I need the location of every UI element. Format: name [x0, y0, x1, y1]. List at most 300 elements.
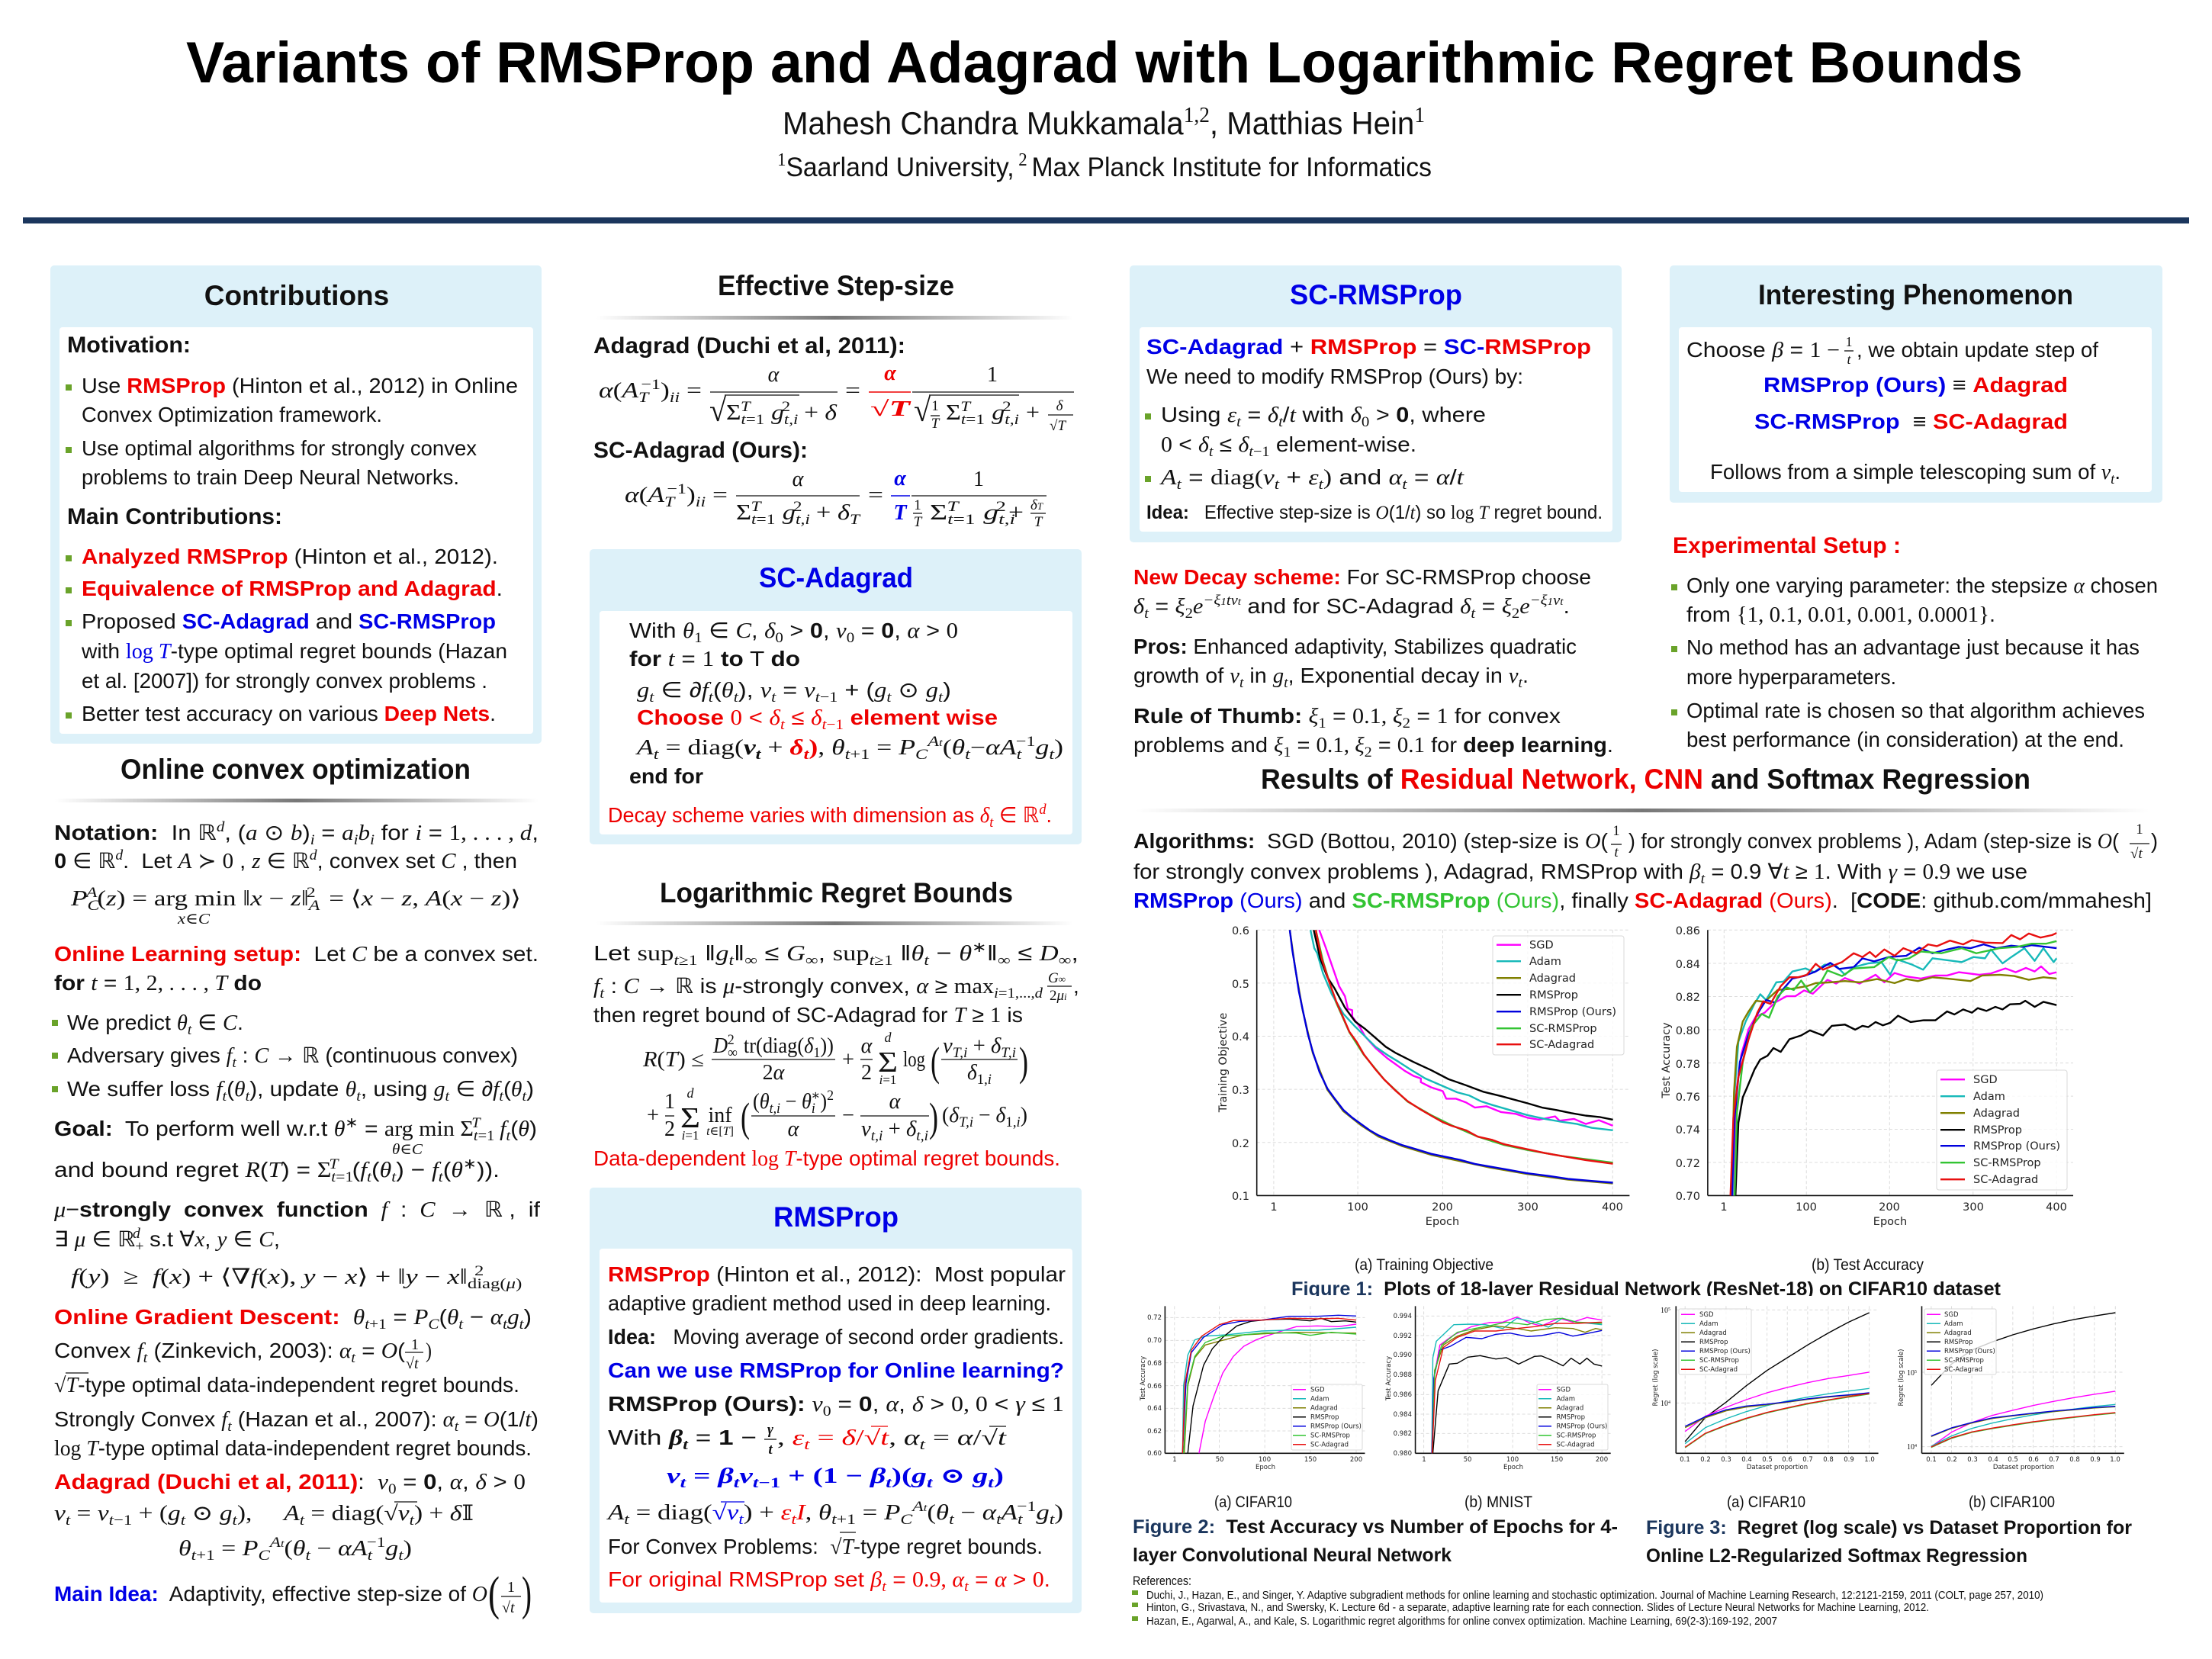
figure 3 caption: Online L2-Regularized Softmax Regression: [1646, 1545, 2027, 1567]
panel: sc-adagrad: [590, 549, 1082, 844]
heading: logarithmic regret bounds: Logarithmic Regret Bounds: [660, 877, 1013, 908]
x axis labels: 50: [1216, 1456, 1223, 1464]
formula: rmsprop update: γ: [767, 1422, 773, 1438]
y axis labels: [1898, 1349, 1917, 1452]
formula: rmsprop update: For Convex Problems: √T-type regret bounds.: [608, 1535, 1043, 1559]
formula: sc-adagrad step-size: T: [914, 514, 923, 530]
formula: regret bound: (: [931, 1039, 940, 1085]
text block: assumptions: ft : C → ℝ is μ-strongly convex, α ≥ maxi=1,...,d: [593, 974, 1043, 1002]
y axis labels: Training Objective: [1217, 1013, 1230, 1113]
text block: algorithms: t: [1614, 844, 1619, 860]
text block: main contributions: Better test accuracy on various Deep Nets.: [82, 702, 496, 725]
chart: mnist cnn test accuracy: [1385, 1306, 1611, 1471]
x axis labels: 300: [1517, 1201, 1538, 1214]
formula: regret bound: [642, 1030, 1028, 1144]
x axis labels: 100: [1347, 1201, 1368, 1214]
text block: online learning setup: Adversary gives ft : C → ℝ (continuous convex): [67, 1043, 518, 1071]
formula: adagrad step-size: α: [884, 362, 896, 385]
x axis labels: 200: [1350, 1456, 1362, 1464]
text block: experimental setup: Optimal rate is chosen so that algorithm achieves: [1686, 699, 2145, 722]
legend: SC-RMSProp: [1699, 1357, 1739, 1365]
y axis labels: 0.64: [1147, 1405, 1162, 1413]
formula: regret bound: d: [885, 1030, 892, 1045]
text block: online learning setup: We predict θt ∈ C.: [67, 1011, 243, 1038]
text block: adagrad: vt = vt−1 + ( gt ⊙ gt), At = diag(√ vt) + δ𝕀: [54, 1502, 474, 1529]
algorithm: sc-adagrad: Decay scheme varies with dimension as δt ∈ ℝd.: [608, 802, 1052, 831]
text block: new decay scheme: Pros: Enhanced adaptivity, Stabilizes quadratic: [1133, 635, 1577, 658]
formula: regret bound: α: [861, 1034, 873, 1058]
formula: adagrad step-size: 1: [931, 398, 939, 414]
references: Hinton, G., Srivastava, N., and Swersky, K. Lecture 6d - a separate, adaptive learning rate for each connection. Slides of Lecture Neural Networks for Machine Learning, 2012.: [1146, 1602, 1929, 1614]
text block: strongly convex function: [53, 1198, 540, 1292]
formula: adagrad step-size: √T: [1050, 418, 1066, 434]
x axis labels: 1.0: [1864, 1456, 1875, 1464]
text block: equivalences: t: [1847, 352, 1851, 367]
formula: rmsprop update: v t = β tv t−1 + (1 − β t)( g t ⊙ g t): [667, 1464, 1004, 1491]
legend: RMSProp: [1699, 1339, 1728, 1346]
references: Duchi, J., Hazan, E., and Singer, Y. Adaptive subgradient methods for online learning and stochastic optimization. Journal of Machine Learning Research, 12:2121-2159, 2011 (COLT, page 257, 2010): [1146, 1590, 2043, 1602]
text block: rmsprop description: [608, 1262, 1066, 1419]
text block: algorithms: [1133, 821, 2158, 912]
formula: adagrad step-size: Σt=1T gt,i2 + δ: [726, 399, 838, 428]
formula: regret bound: log: [903, 1048, 925, 1072]
x axis labels: Epoch: [1503, 1464, 1523, 1471]
y axis labels: Test Accuracy: [1661, 1022, 1673, 1099]
formula: regret bound: (δT,i − δ1,i): [942, 1104, 1027, 1130]
references: References:: [1133, 1574, 1191, 1588]
figure 1 caption: Figure 1: Plots of 18-layer Residual Network (ResNet-18) on CIFAR10 dataset: [1291, 1278, 2001, 1300]
x axis labels: 1.0: [2110, 1456, 2120, 1464]
text block: online gradient descent: Convex ft (Zinkevich, 2003): αt = O(: [54, 1339, 406, 1366]
formula: adagrad step-size: Adagrad (Duchi et al, 2011):: [593, 333, 905, 358]
authors: Mahesh Chandra Mukkamala1,2, Matthias Hein1: [783, 104, 1425, 141]
y axis labels: 0.76: [1676, 1092, 1700, 1104]
legend: SC-RMSProp: [1944, 1357, 1984, 1365]
text block: rmsprop description: Can we use RMSProp for Online learning?: [608, 1358, 1064, 1382]
text block: motivation: Use optimal algorithms for strongly convex: [82, 436, 477, 460]
formula: adagrad step-size: Σt=1T gt,i2: [946, 399, 1019, 428]
formula: sc-adagrad step-size: α(AT−1)ii =: [625, 481, 728, 510]
legend: Adagrad: [1944, 1329, 1972, 1337]
chart: cifar100 regret: [1898, 1306, 2124, 1471]
text block: online learning setup: for t = 1, 2, . . . , T do: [54, 971, 262, 995]
y axis labels: 0.72: [1147, 1314, 1162, 1322]
text block: online gradient descent: Strongly Convex ft (Hazan et al., 2007): αt = O(1/t): [54, 1407, 539, 1435]
formula: sc-adagrad step-size: SC-Adagrad (Ours):: [593, 438, 808, 463]
y axis labels: 0.66: [1147, 1383, 1162, 1391]
y axis labels: Test Accuracy: [1140, 1356, 1147, 1401]
panel: rmsprop: [590, 1188, 1082, 1613]
text block: online learning setup: We suffer loss ft(θt), update θt, using gt ∈ ∂ft(θt): [67, 1077, 534, 1104]
formula: adagrad step-size: δ: [1056, 398, 1064, 414]
text block: motivation: Use RMSProp (Hinton et al., 2012) in Online: [82, 374, 518, 397]
algorithm: sc-adagrad: At = diag( vt + δt), θt+1 = PCAt(θt−αA t−1gt): [635, 734, 1063, 763]
x axis labels: 200: [1879, 1201, 1900, 1214]
chart: training objective: [1217, 925, 1629, 1228]
y axis labels: 0.4: [1232, 1031, 1249, 1043]
x axis labels: 150: [1551, 1456, 1563, 1464]
text block: strongly convex function: f(y) ≥ f(x) + ⟨∇ f(x), y − x⟩ + ‖ y − x‖diag( μ)2: [71, 1263, 522, 1292]
formula: adagrad step-size: +: [1026, 401, 1040, 425]
y axis labels: 0.5: [1232, 979, 1249, 991]
callout: main idea: ): [522, 1568, 532, 1620]
text block: equivalences: Choose β = 1 −: [1686, 338, 1840, 362]
y axis labels: 5: [1668, 1307, 1670, 1312]
section: effective step-size: [593, 270, 1074, 530]
heading: interesting phenomenon: Interesting Phenomenon: [1758, 279, 2073, 310]
formula: regret bound: +: [842, 1048, 854, 1072]
y axis labels: 0.86: [1676, 925, 1700, 937]
algorithm: sc-adagrad: gt ∈ ∂ ft(θt), vt = vt−1 + (gt ⊙ gt): [637, 678, 951, 706]
x axis labels: 0.3: [1721, 1456, 1731, 1464]
x axis labels: Dataset proportion: [1993, 1464, 2054, 1471]
formula: regret bound: ): [1019, 1039, 1028, 1085]
formula: adagrad step-size: √ T: [870, 397, 912, 421]
formula: sc-adagrad step-size: =: [868, 484, 883, 507]
legend: [1937, 1070, 2067, 1190]
text block: assumptions: ,: [1073, 974, 1079, 998]
x axis labels: [1926, 1456, 2120, 1471]
text block: goal: [54, 1115, 537, 1185]
figure 2 caption: Figure 2: Test Accuracy vs Number of Epochs for 4-: [1133, 1516, 1618, 1538]
text block: main contributions: [66, 504, 507, 725]
text block: new decay scheme: problems and ξ1 = 0.1, ξ2 = 0.1 for deep learning.: [1133, 733, 1613, 760]
text block: notation: [54, 819, 539, 928]
note: data-dependent bounds: Data-dependent log T-type optimal regret bounds.: [593, 1146, 1060, 1171]
heading: online convex optimization: Online convex optimization: [121, 754, 471, 785]
formula: regret bound: i=1: [682, 1128, 699, 1143]
section: results: [1133, 764, 2158, 912]
y axis labels: [1217, 925, 1249, 1203]
x axis labels: 0.8: [1823, 1456, 1834, 1464]
y axis labels: 5: [1915, 1370, 1917, 1374]
text block: online gradient descent: √t: [406, 1355, 419, 1372]
algorithm: sc-adagrad: With θ1 ∈ C, δ0 > 0, v0 = 0, α > 0: [629, 619, 958, 646]
text block: sc-rmsprop description: At = diag( vt + εt) and αt = α/t: [1159, 465, 1464, 493]
x axis labels: 0.7: [2049, 1456, 2059, 1464]
text block: algorithms: ) for strongly convex problems ), Adam (step-size is O(: [1628, 829, 2120, 854]
legend: SC-RMSProp: [1973, 1157, 2041, 1169]
text block: main contributions: Main Contributions:: [67, 504, 282, 529]
legend: SC-RMSProp: [1310, 1432, 1350, 1440]
x axis labels: 1: [1270, 1201, 1278, 1214]
y axis labels: 0.990: [1394, 1352, 1412, 1359]
y axis labels: 10: [1661, 1400, 1668, 1408]
figure 2 and 3 subcaptions: (a) CIFAR10: [1214, 1493, 1292, 1511]
x axis labels: 0.9: [2090, 1456, 2101, 1464]
formula: rmsprop update: For original RMSProp set βt = 0.9, αt = α > 0.: [608, 1567, 1050, 1595]
legend: SGD: [1944, 1311, 1959, 1319]
formula: rmsprop update: With βt = 1 −: [608, 1426, 757, 1453]
legend: RMSProp (Ours): [1699, 1348, 1751, 1355]
section: logarithmic regret bounds: [593, 877, 1079, 1171]
text block: sc-rmsprop description: Idea: Effective step-size is O(1/t) so log T regret bound.: [1146, 502, 1603, 523]
x axis labels: 0.6: [2028, 1456, 2039, 1464]
x axis labels: 100: [1259, 1456, 1271, 1464]
formula: adagrad step-size: [593, 333, 1074, 434]
formula: regret bound: α: [788, 1117, 800, 1141]
text block: main contributions: Equivalence of RMSProp and Adagrad .: [82, 577, 503, 600]
y axis labels: 0.78: [1676, 1059, 1700, 1071]
text block: equivalences: , we obtain update step of: [1857, 338, 2098, 362]
legend: SGD: [1556, 1387, 1571, 1394]
panel: interesting phenomenon: [1670, 265, 2162, 503]
y axis labels: [1661, 925, 1700, 1203]
heading: rmsprop: RMSProp: [773, 1201, 899, 1233]
text block: assumptions: 2μi: [1050, 988, 1067, 1004]
formula: regret bound: D∞2 tr(diag(δ1)): [712, 1032, 834, 1061]
formula: regret bound: −: [842, 1104, 854, 1127]
text block: assumptions: G∞: [1048, 970, 1066, 986]
legend: Adagrad: [1973, 1108, 2020, 1120]
text block: notation: Notation: In ℝd, (a ⊙ b)i = aibi for i = 1, . . . , d,: [54, 819, 539, 848]
legend: RMSProp (Ours): [1944, 1348, 1995, 1355]
text block: online gradient descent: Online Gradient Descent: θt+1 = PC(θt − αtgt): [54, 1305, 532, 1333]
legend: SC-RMSProp: [1529, 1023, 1597, 1035]
text block: online gradient descent: [54, 1305, 539, 1461]
legend: Adam: [1310, 1396, 1329, 1403]
formula: regret bound: (θt,i − θi∗)2: [753, 1088, 834, 1117]
text block: assumptions: [593, 940, 1079, 1027]
text block: sc-rmsprop description: [1145, 335, 1603, 523]
formula: regret bound: α: [889, 1090, 902, 1114]
formula: sc-adagrad step-size: Σt=1T gt,i2 + δT: [736, 499, 861, 528]
heading: sc-rmsprop: SC-RMSProp: [1290, 279, 1462, 310]
x axis labels: 0.5: [2008, 1456, 2018, 1464]
text block: goal: θ∈C: [392, 1141, 423, 1158]
figure 2 and 3 subcaptions: (b) MNIST: [1464, 1493, 1532, 1511]
formula: adagrad step-size: T: [931, 416, 940, 432]
text block: main contributions: Analyzed RMSProp (Hinton et al., 2012).: [82, 545, 498, 568]
y axis labels: 0.994: [1394, 1313, 1412, 1320]
x axis labels: [1680, 1456, 1875, 1471]
y axis labels: 0.984: [1394, 1411, 1412, 1419]
x axis labels: 400: [1602, 1201, 1623, 1214]
text block: algorithms: √t: [2130, 846, 2143, 862]
text block: motivation: [66, 333, 518, 489]
formula: regret bound: 2: [861, 1061, 872, 1085]
formula: regret bound: +: [647, 1104, 659, 1127]
formula: regret bound: t∈[T]: [706, 1125, 734, 1138]
formula: regret bound: Σ: [680, 1102, 700, 1134]
formula: adagrad step-size: √: [914, 394, 931, 429]
legend: RMSProp (Ours): [1310, 1423, 1362, 1431]
text block: assumptions: then regret bound of SC-Adagrad for T ≥ 1 is: [593, 1003, 1023, 1027]
text block: strongly convex function: μ−strongly convex function f : C → ℝ , if: [53, 1198, 540, 1222]
formula: regret bound: (: [741, 1095, 750, 1140]
formula: sc-adagrad step-size: 1: [973, 468, 984, 491]
x axis labels: Epoch: [1256, 1464, 1275, 1471]
title: Variants of RMSProp and Adagrad with Logarithmic Regret Bounds: [186, 31, 2023, 95]
algorithm: sc-adagrad: end for: [629, 764, 703, 788]
legend: RMSProp (Ours): [1529, 1006, 1616, 1018]
legend: Adam: [1556, 1396, 1575, 1403]
legend: SC-Adagrad: [1699, 1366, 1738, 1374]
legend: Adam: [1973, 1091, 2005, 1103]
chart: cifar10 regret: [1652, 1306, 1879, 1471]
x axis labels: 0.2: [1947, 1456, 1957, 1464]
x axis labels: 0.7: [1802, 1456, 1813, 1464]
text block: sc-rmsprop description: SC-Adagrad + RMSProp = SC-RMSProp: [1146, 335, 1591, 358]
callout: main idea: (: [488, 1568, 500, 1620]
text block: sc-rmsprop description: 0 < δt ≤ δt−1 element-wise.: [1161, 432, 1416, 460]
legend: RMSProp (Ours): [1556, 1423, 1607, 1431]
formula: sc-adagrad step-size: Σ t=1T g t,i2: [930, 499, 1015, 528]
text block: adagrad: Adagrad (Duchi et al, 2011) : v0 = 0, α, δ > 0: [54, 1470, 526, 1497]
x axis labels: 1: [1720, 1201, 1728, 1214]
text block: rmsprop description: Idea: Moving average of second order gradients.: [608, 1325, 1064, 1349]
formula: regret bound: 2: [664, 1117, 675, 1141]
text block: motivation: Convex Optimization framework.: [82, 403, 382, 426]
text block: goal: Goal: To perform well w.r.t θ∗ = arg min Σt=1T ft(θ): [54, 1115, 537, 1144]
legend: RMSProp: [1310, 1414, 1339, 1422]
formula: adagrad step-size: α: [768, 363, 780, 387]
x axis labels: 50: [1464, 1456, 1471, 1464]
x axis labels: 0.5: [1762, 1456, 1773, 1464]
formula: regret bound: vt,i + δt,i: [861, 1117, 928, 1144]
text block: online learning setup: Online Learning setup: Let C be a convex set.: [54, 942, 539, 966]
formula: sc-adagrad step-size: 1: [914, 497, 921, 513]
text block: notation: x∈C: [177, 911, 211, 928]
formula: rmsprop update: , εt = δ/√ t, α t = α/√ t: [777, 1426, 1008, 1453]
x axis labels: Epoch: [1426, 1216, 1459, 1228]
text block: new decay scheme: Rule of Thumb: ξ1 = 0.1, ξ2 = 1 for convex: [1133, 704, 1561, 731]
figure 1 subcaptions: [1355, 1256, 1924, 1274]
algorithm: sc-adagrad: for t = 1 to T do: [629, 647, 800, 671]
formula: adagrad step-size: α(AT−1)ii =: [599, 377, 702, 406]
formula: rmsprop update: At = diag( √vt) + εtI, θt+1 = PCAt(θt − αtAt−1gt): [606, 1499, 1063, 1528]
formula: adagrad step-size: 1: [987, 363, 998, 387]
y axis labels: 10: [1907, 1443, 1915, 1452]
y axis labels: 0.70: [1676, 1191, 1700, 1203]
text block: algorithms: 1: [2136, 821, 2143, 838]
formula: sc-adagrad step-size: [593, 438, 1047, 530]
formula: regret bound: inf: [708, 1104, 732, 1127]
text block: equivalences: 1: [1846, 334, 1852, 349]
y axis labels: 0.70: [1147, 1337, 1162, 1345]
text block: sc-rmsprop description: We need to modify RMSProp (Ours) by:: [1146, 365, 1523, 388]
callout: main idea: 1: [507, 1579, 515, 1596]
legend: RMSProp: [1529, 989, 1578, 1002]
legend: Adam: [1944, 1320, 1963, 1328]
legend: SGD: [1310, 1387, 1325, 1394]
text block: online learning setup: [52, 942, 539, 1104]
callout: main idea: [54, 1568, 532, 1620]
formula: sc-adagrad step-size: α: [894, 467, 906, 490]
text block: rmsprop description: RMSProp (Hinton et al., 2012): Most popular: [608, 1262, 1066, 1286]
text block: notation: 0 ∈ ℝd. Let A ≻ 0 , z ∈ ℝd, convex set C , then: [54, 847, 517, 873]
text block: equivalences: Follows from a simple telescoping sum of vt.: [1710, 460, 2120, 487]
text block: algorithms: Algorithms: SGD (Bottou, 2010) (step-size is O(: [1133, 829, 1609, 854]
text block: online gradient descent: 1: [411, 1336, 419, 1353]
y axis labels: 0.2: [1232, 1138, 1249, 1150]
x axis labels: Dataset proportion: [1747, 1464, 1808, 1471]
y axis labels: Test Accuracy: [1385, 1356, 1393, 1401]
text block: experimental setup: more hyperparameters.: [1686, 665, 1896, 689]
formula: regret bound: Σ: [878, 1047, 898, 1079]
callout: main idea: √t: [502, 1600, 515, 1616]
y axis labels: 0.80: [1676, 1025, 1700, 1037]
callout: main idea: Main Idea: Adaptivity, effective step-size of O: [54, 1582, 487, 1606]
formula: rmsprop update: [606, 1422, 1063, 1595]
text block: equivalences: [1686, 334, 2120, 487]
y axis labels: 0.62: [1147, 1428, 1162, 1436]
text block: equivalences: RMSProp (Ours) ≡ Adagrad: [1763, 373, 2068, 397]
figure 2 and 3 subcaptions: (b) CIFAR100: [1969, 1493, 2055, 1511]
y axis labels: 0.60: [1147, 1450, 1162, 1458]
heading: results: Results of Residual Network, CNN and Softmax Regression: [1261, 764, 2030, 795]
x axis labels: 0.4: [1988, 1456, 1998, 1464]
legend: [1537, 1384, 1608, 1450]
y axis labels: 0.68: [1147, 1360, 1162, 1368]
x axis labels: 100: [1796, 1201, 1817, 1214]
y axis labels: 0.3: [1232, 1085, 1249, 1097]
text block: experimental setup: [1671, 533, 2158, 751]
text block: new decay scheme: δt = ξ2e−ξ1tvt and for SC-Adagrad δt = ξ2e−ξ1vt.: [1133, 593, 1570, 622]
text block: algorithms: RMSProp (Ours) and SC-RMSProp (Ours), finally SC-Adagrad (Ours). [CODE: github.com/mmahesh]: [1133, 889, 2152, 912]
formula: sc-adagrad step-size: +: [1008, 501, 1024, 525]
x axis labels: 100: [1506, 1456, 1519, 1464]
text block: motivation: Motivation:: [67, 333, 191, 358]
legend: [1924, 1309, 1996, 1374]
formula: sc-adagrad step-size: δT: [1030, 497, 1043, 513]
formula: regret bound: d: [686, 1085, 694, 1101]
x axis labels: 0.2: [1700, 1456, 1711, 1464]
text block: motivation: problems to train Deep Neural Networks.: [82, 465, 459, 489]
text block: adagrad: θt+1 = PCAt(θt − αA t−1gt): [178, 1535, 412, 1564]
x axis labels: 1: [1172, 1456, 1177, 1464]
text block: equivalences: SC-RMSProp ≡ SC-Adagrad: [1754, 410, 2068, 433]
legend: Adagrad: [1556, 1405, 1583, 1413]
heading: sc-adagrad: SC-Adagrad: [759, 562, 913, 593]
text block: new decay scheme: [1133, 565, 1613, 760]
formula: regret bound: i=1: [879, 1072, 896, 1087]
legend: SC-Adagrad: [1944, 1366, 1982, 1374]
heading: effective step-size: Effective Step-size: [718, 270, 954, 301]
legend: SGD: [1973, 1074, 1998, 1086]
text block: main contributions: et al. [2007]) for strongly convex problems .: [82, 669, 487, 693]
x axis labels: 0.9: [1844, 1456, 1854, 1464]
legend: Adagrad: [1529, 973, 1576, 985]
y axis labels: 0.1: [1232, 1191, 1249, 1203]
panel: sc-rmsprop: [1130, 265, 1622, 542]
header: [23, 31, 2189, 223]
legend: SGD: [1699, 1311, 1714, 1319]
formula: sc-adagrad step-size: α: [793, 468, 805, 491]
formula: adagrad step-size: √: [709, 394, 727, 429]
y axis labels: [1652, 1307, 1670, 1408]
y axis labels: 0.84: [1676, 959, 1700, 971]
legend: SC-Adagrad: [1529, 1039, 1594, 1051]
legend: Adam: [1699, 1320, 1718, 1328]
chart: test accuracy: [1661, 925, 2073, 1228]
text block: main contributions: Proposed SC-Adagrad and SC-RMSProp: [82, 609, 496, 633]
legend: RMSProp: [1944, 1339, 1973, 1346]
formula: regret bound: 1: [664, 1090, 675, 1114]
figure 3 caption: Figure 3: Regret (log scale) vs Dataset Proportion for: [1646, 1517, 2132, 1538]
legend: Adagrad: [1310, 1405, 1338, 1413]
text block: assumptions: Let sup t≥1 ‖gt‖∞ ≤ G∞, sup t≥1 ‖θt − θ∗‖∞ ≤ D∞,: [593, 940, 1079, 969]
text block: experimental setup: No method has an advantage just because it has: [1686, 635, 2140, 659]
text block: main contributions: with log T-type optimal regret bounds (Hazan: [81, 639, 507, 664]
x axis labels: 1: [1422, 1456, 1426, 1464]
y axis labels: 0.986: [1394, 1391, 1412, 1399]
text block: strongly convex function: ∃ μ ∈ ℝ+d s.t ∀x, y ∈ C,: [54, 1226, 280, 1255]
text block: online gradient descent: √T-type optimal data-independent regret bounds.: [54, 1373, 519, 1397]
y axis labels: Regret (log scale): [1652, 1349, 1660, 1406]
text block: experimental setup: Only one varying parameter: the stepsize α chosen: [1686, 574, 2158, 598]
text block: new decay scheme: growth of vt in gt, Exponential decay in vt.: [1133, 664, 1529, 691]
